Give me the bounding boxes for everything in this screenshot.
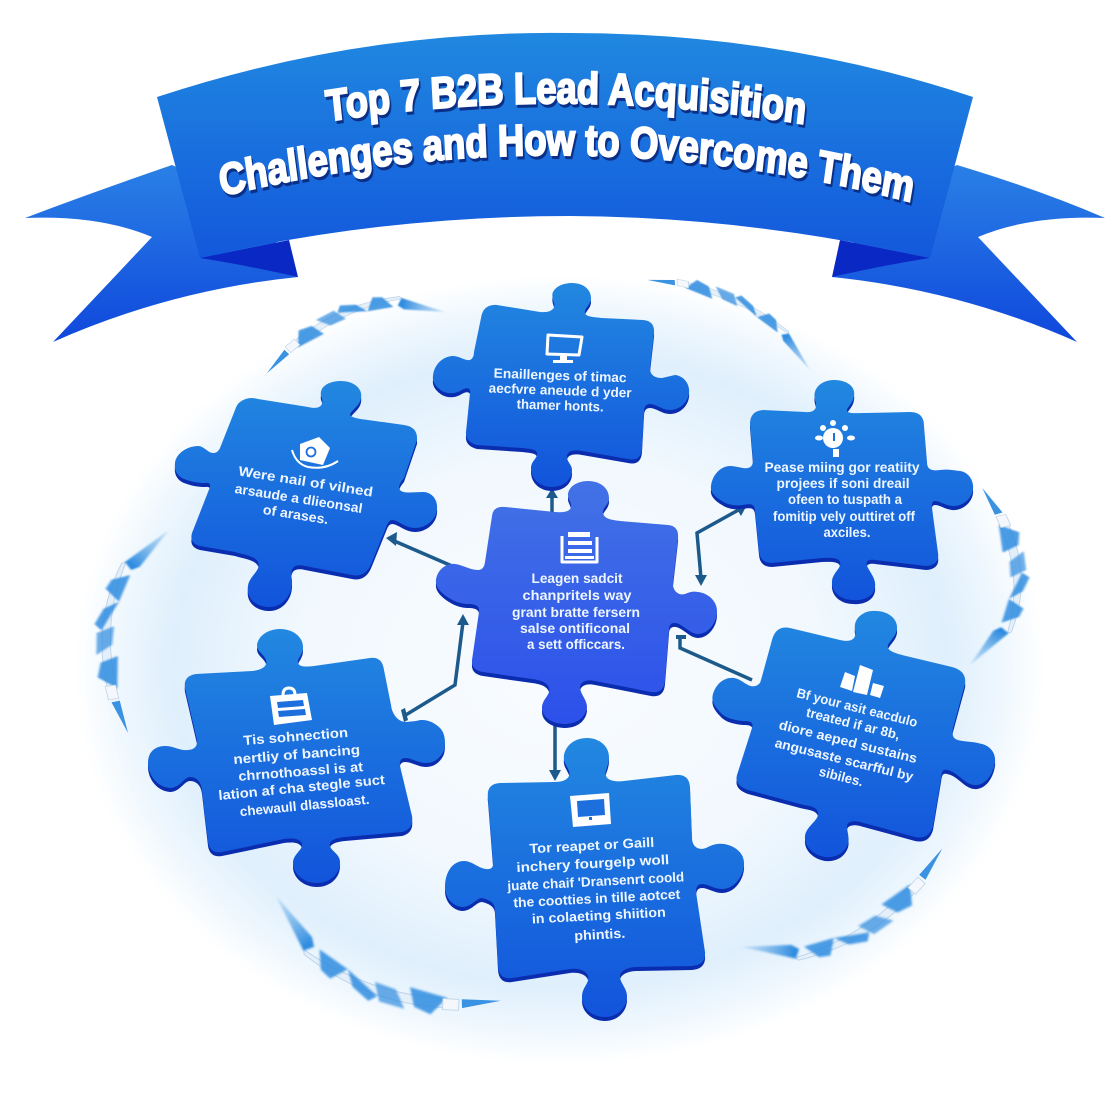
arrow: center to lower right (676, 635, 752, 680)
text: lower left piece (218, 725, 386, 819)
text: center piece: salse ontificonal (520, 621, 630, 636)
title: Challenges and How to Overcome Them (220, 124, 915, 206)
text: lower right piece: Bf your asit eacdulo (795, 685, 919, 730)
text: upper left piece: arsaude a dlieonsal (234, 481, 364, 516)
text: bottom piece: inchery fourgelp woll (516, 852, 670, 875)
text: lower right piece: diore aeped sustains (777, 717, 919, 766)
puzzle piece: upper right (711, 380, 973, 604)
swirl arrow: right (970, 488, 1035, 669)
text: top piece: Enaillenges of timac (493, 366, 627, 385)
connector arrows (386, 488, 752, 781)
text: top piece: aecfvre aneude d yder (488, 381, 633, 401)
icon: monitor (547, 335, 582, 363)
icon: bulb gear (815, 420, 855, 457)
icon: monitor (570, 793, 611, 827)
text: upper left piece (234, 464, 374, 527)
text: lower right piece: treated if ar 8b, (805, 705, 901, 743)
arrow: center to upper right (695, 505, 747, 586)
text: upper right piece: Pease miing gor reatiity (764, 460, 920, 475)
text: bottom piece: phintis. (574, 926, 626, 943)
arrow: center to upper left (386, 532, 452, 566)
text: top piece: thamer honts. (516, 396, 604, 415)
text: upper right piece: ofeen to tuspath a (788, 492, 902, 507)
icon: bag (270, 688, 312, 725)
text: center piece: grant bratte fersern (512, 605, 640, 620)
text: center piece: Leagen sadcit (532, 571, 623, 586)
text: lower left piece: chrnothoassl is at (238, 759, 364, 784)
puzzle piece: top (433, 283, 689, 491)
text: upper left piece: of arases. (262, 502, 329, 527)
text: lower left piece: chewaull dlassloast. (239, 792, 370, 819)
text: upper right piece: axciles. (824, 525, 870, 540)
text: center piece: chanpritels way (522, 588, 632, 603)
text: lower left piece: lation af cha stegle suct (218, 772, 386, 803)
text: bottom piece: the cootties in tille aotcet (513, 887, 681, 910)
text: lower right piece (773, 685, 919, 789)
puzzle piece: center (436, 481, 717, 728)
ribbon main band (157, 33, 973, 258)
text: upper left piece: Were nail of vilned (237, 464, 374, 500)
text: lower left piece: nertliy of bancing (233, 742, 361, 767)
banner ribbon (25, 33, 1105, 342)
arrow: center to lower left (401, 614, 469, 722)
text: bottom piece: in colaeting shiition (531, 905, 666, 927)
text: lower right piece: sibiles. (817, 764, 865, 789)
icon: document (562, 532, 597, 562)
title: Top 7 B2B Lead Acquisition (324, 70, 808, 128)
text: upper right piece: projees if soni dreail (776, 476, 910, 491)
arrow: center to top (546, 488, 558, 516)
text: lower right piece: angusaste scarfful by (773, 735, 915, 784)
swirl arrow: top left (254, 274, 445, 373)
text: top piece (488, 366, 633, 415)
icon: bars (840, 665, 884, 698)
puzzle piece: lower right (712, 611, 995, 861)
swirl arrow: top right (647, 252, 825, 370)
puzzle piece: lower left (148, 629, 445, 887)
ribbon right fold (832, 240, 930, 277)
text: upper right piece: fomitip vely outtiret off (773, 509, 915, 524)
text: center piece: a sett officcars. (527, 637, 625, 652)
background glow (75, 275, 1045, 1065)
text: center piece (512, 571, 640, 652)
title (220, 70, 915, 206)
swirl arrow: left (75, 519, 169, 733)
text: bottom piece: Tor reapet or Gaill (529, 835, 655, 856)
puzzle piece: upper left (175, 381, 437, 611)
text: bottom piece (506, 835, 685, 943)
ribbon left fold (200, 240, 298, 277)
ribbon right tail (832, 165, 1105, 342)
ribbon left tail (25, 165, 298, 342)
swirl arrow: lower right (742, 848, 965, 992)
swirl arrow: lower left (252, 896, 501, 1052)
text: lower left piece: Tis sohnection (243, 725, 349, 748)
arrow: center to bottom (549, 720, 561, 781)
puzzle piece: bottom (445, 738, 744, 1021)
text: upper right piece (764, 460, 920, 540)
icon: house box (292, 437, 338, 468)
text: bottom piece: juate chaif 'Dransenrt coold (506, 869, 685, 894)
